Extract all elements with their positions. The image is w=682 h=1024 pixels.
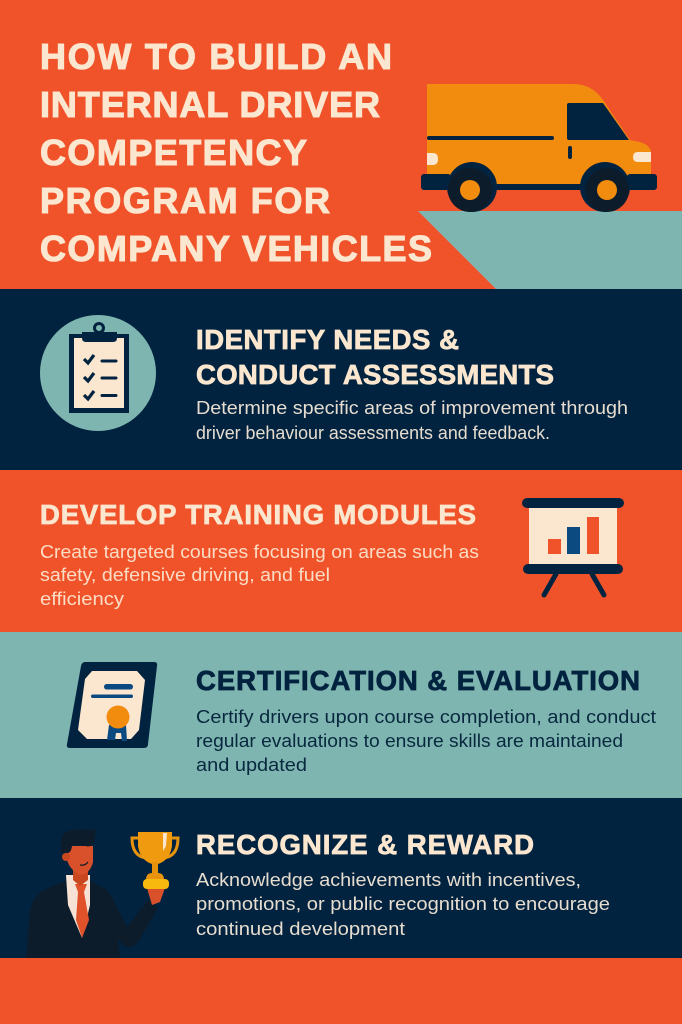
title: INTERNAL DRIVER [40, 84, 380, 125]
title: COMPETENCY [40, 132, 307, 173]
icon: certificate [67, 662, 157, 748]
heading [196, 324, 554, 390]
description: promotions, or public recognition to encourage [196, 894, 610, 914]
description [196, 398, 628, 443]
icon: presentation board [522, 498, 624, 595]
title: COMPANY VEHICLES [40, 228, 432, 269]
heading: IDENTIFY NEEDS & [196, 324, 459, 355]
description: continued development [196, 919, 405, 939]
heading: CONDUCT ASSESSMENTS [196, 359, 554, 390]
road shape [418, 211, 682, 289]
description: safety, defensive driving, and fuel [40, 565, 330, 585]
description [40, 542, 479, 609]
description: Certify drivers upon course completion, and conduct [196, 707, 656, 727]
description: and updated [196, 755, 307, 775]
illustration: businessman holding trophy [26, 829, 178, 958]
description: Determine specific areas of improvement through [196, 398, 628, 418]
description [196, 870, 610, 939]
panel: identify needs [0, 289, 682, 470]
title: PROGRAM FOR [40, 180, 330, 221]
panel: recognize and reward [0, 798, 682, 958]
description: driver behaviour assessments and feedback. [196, 423, 550, 443]
description: regular evaluations to ensure skills are maintained [196, 731, 623, 751]
icon: delivery van [421, 84, 657, 212]
description: efficiency [40, 589, 124, 609]
description: Acknowledge achievements with incentives, [196, 870, 581, 890]
footer band [0, 958, 682, 1024]
panel: header [0, 0, 682, 289]
heading: RECOGNIZE & REWARD [196, 829, 534, 860]
icon: clipboard checklist [40, 315, 156, 431]
panel: develop training modules [0, 470, 682, 632]
heading: DEVELOP TRAINING MODULES [40, 499, 476, 530]
description: Create targeted courses focusing on areas such as [40, 542, 479, 562]
panel: certification and evaluation [0, 632, 682, 798]
title [40, 36, 432, 269]
heading: CERTIFICATION & EVALUATION [196, 665, 640, 696]
title: HOW TO BUILD AN [40, 36, 392, 77]
description [196, 707, 656, 775]
